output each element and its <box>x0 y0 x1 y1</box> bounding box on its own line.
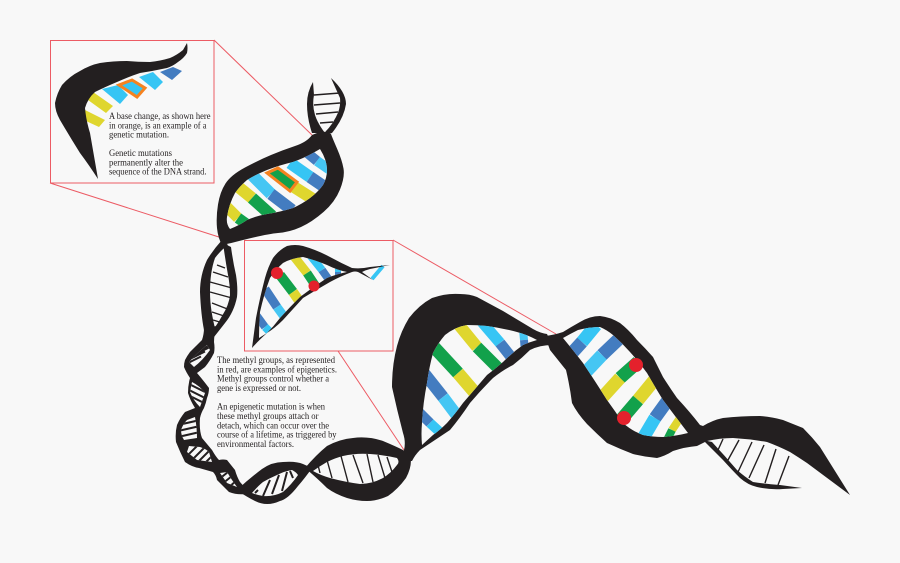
text: epigenetics note: An epigenetic mutation is when <box>217 402 325 412</box>
text: epigenetics note: environmental factors. <box>217 439 294 449</box>
text: epigenetics note: gene is expressed or not. <box>217 383 301 393</box>
text: genetic mutation note: Genetic mutations <box>109 148 172 158</box>
text: epigenetics note <box>217 355 337 449</box>
callout box: methyl groups <box>244 240 393 351</box>
inset: black strand <box>55 43 188 179</box>
icon: methyl groups <box>617 358 643 425</box>
callout box: base change <box>50 40 214 183</box>
text: genetic mutation note: in orange, is an example of a <box>109 120 206 130</box>
text: epigenetics note: detach, which can occur over the <box>217 420 329 430</box>
text: genetic mutation note: permanently alter the <box>109 157 183 167</box>
text: epigenetics note: Methyl groups control whether a <box>217 374 329 384</box>
icon: methyl groups <box>271 267 320 292</box>
text: epigenetics note: these methyl groups attach or <box>217 411 318 421</box>
inset: coloured base pairs <box>257 254 383 337</box>
text: genetic mutation note: A base change, as shown here <box>109 111 210 121</box>
text: genetic mutation note <box>109 111 210 176</box>
DNA strand: bottom black helix <box>238 437 411 504</box>
text: genetic mutation note: genetic mutation. <box>109 130 169 140</box>
text: epigenetics note: in red, are examples of epigenetics. <box>217 364 337 374</box>
text: epigenetics note: The methyl groups, as represented <box>217 355 335 365</box>
DNA strand: top small helix <box>307 78 346 136</box>
inset: coloured base pairs <box>85 67 182 127</box>
text: epigenetics note: course of a lifetime, as triggered by <box>217 430 337 440</box>
DNA strand: lower-left squiggle with hatched holes <box>176 326 247 494</box>
DNA strand: left black helix <box>200 240 237 337</box>
DNA strand: upper coloured lobe with base change <box>217 131 344 245</box>
text: genetic mutation note: sequence of the DNA strand. <box>109 166 206 176</box>
callout connector lines <box>50 40 556 450</box>
inset: black strand <box>252 245 390 348</box>
DNA strand: large coloured lobe <box>392 294 552 461</box>
DNA strand: right coloured lobe and tail <box>545 316 850 495</box>
